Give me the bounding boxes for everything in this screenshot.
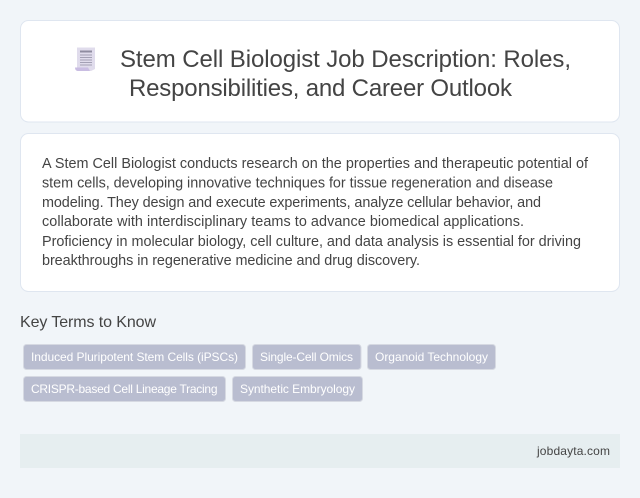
description text: breakthroughs in regenerative medicine and drug discovery. xyxy=(42,253,420,269)
description text: modeling. They design and execute experiments, analyze cellular behavior, and xyxy=(42,195,541,211)
footer xyxy=(20,434,620,468)
footer: jobdayta.com xyxy=(536,444,610,458)
title panel xyxy=(20,20,620,122)
tag: synthetic embryology: Synthetic Embryology xyxy=(240,382,355,396)
description text: collaborate with interdisciplinary teams to advance biomedical applications. xyxy=(42,214,524,230)
heading: Responsibilities, and Career Outlook xyxy=(129,75,513,102)
tag: organoid technology: Organoid Technology xyxy=(375,350,488,364)
description text: stem cells, developing innovative techniques for tissue regeneration and disease xyxy=(42,176,553,192)
description text: A Stem Cell Biologist conducts research on the properties and therapeutic potential of xyxy=(42,156,589,172)
tag: organoid technology xyxy=(368,344,496,370)
description panel xyxy=(20,134,620,292)
tag: single-cell omics: Single-Cell Omics xyxy=(260,350,353,364)
description text: Proficiency in molecular biology, cell culture, and data analysis is essential for driving xyxy=(42,234,581,250)
heading: key terms: Key Terms to Know xyxy=(20,314,156,331)
tag: synthetic embryology xyxy=(232,376,362,402)
description text xyxy=(42,156,589,269)
heading xyxy=(120,46,571,102)
tag: CRISPR lineage tracing: CRISPR-based Cell Lineage Tracing xyxy=(31,382,218,396)
heading: Stem Cell Biologist Job Description: Roles, xyxy=(120,46,571,73)
tag: CRISPR lineage tracing xyxy=(24,376,226,402)
tag: iPSCs: Induced Pluripotent Stem Cells (iPSCs) xyxy=(31,350,238,364)
tag: iPSCs xyxy=(24,344,246,370)
tag: single-cell omics xyxy=(252,344,361,370)
key term tags xyxy=(24,344,496,402)
icon: document scroll xyxy=(75,48,95,71)
